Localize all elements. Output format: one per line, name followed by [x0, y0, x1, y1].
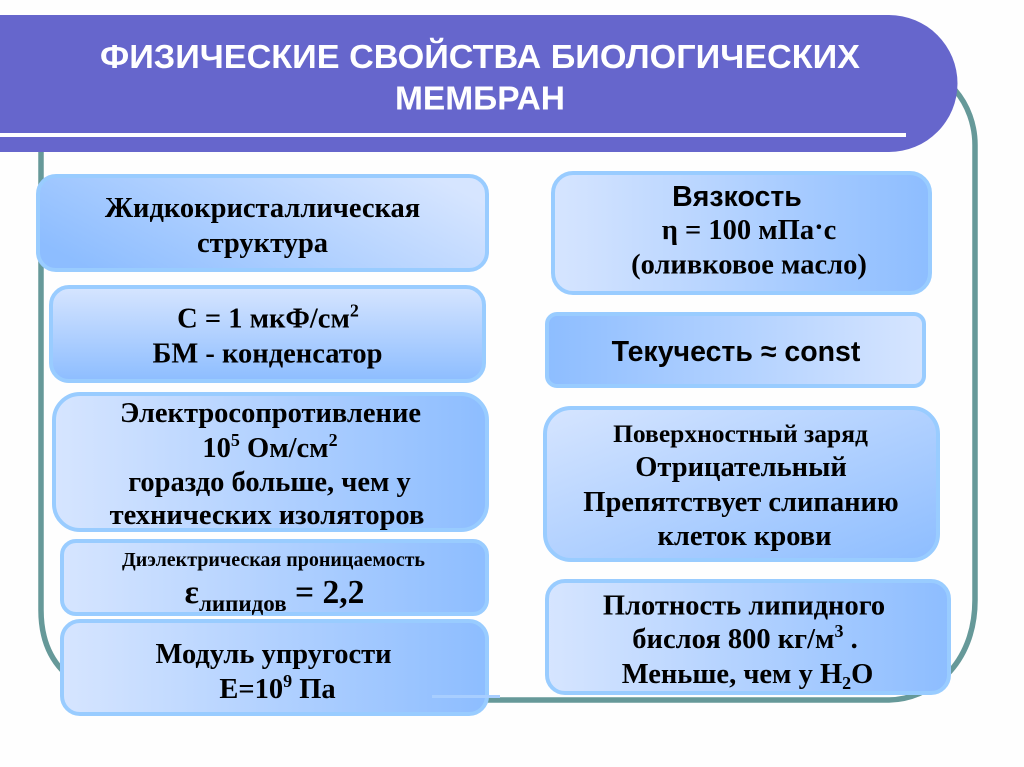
title — [100, 37, 860, 116]
panel: capacitance — [51, 287, 484, 381]
panel: dielectric permittivity: липидов — [199, 591, 287, 616]
panel: surface charge: Отрицательный — [635, 452, 847, 483]
panel: elastic modulus: 9 — [283, 671, 292, 691]
panel: surface charge: клеток крови — [657, 521, 832, 552]
panel: dielectric permittivity — [62, 541, 487, 616]
panel: elastic modulus: E=10 — [219, 674, 283, 705]
panel: dielectric permittivity: = 2,2 — [287, 574, 364, 611]
panel: electrical resistance: Ом/см — [240, 433, 329, 464]
panel: elastic modulus — [62, 621, 500, 714]
panel: capacitance: С = 1 мкФ/см — [177, 304, 350, 334]
panel: capacitance: 2 — [350, 300, 359, 320]
panel: lipid bilayer density: Меньше, чем у H — [622, 659, 842, 690]
panel: viscosity: Вязкость — [672, 181, 802, 213]
panel: capacitance: БМ - конденсатор — [153, 338, 382, 370]
header banner — [0, 15, 957, 152]
panel: lipid bilayer density — [547, 581, 949, 693]
panel: elastic modulus: Па — [292, 674, 336, 705]
panel: fluidity — [547, 314, 924, 386]
panel: lipid bilayer density: 3 — [834, 621, 843, 641]
panel: liquid crystal structure: структура — [197, 228, 328, 259]
panel: liquid crystal structure — [38, 176, 487, 270]
panel: surface charge: Препятствует слипанию — [583, 487, 899, 518]
title: МЕМБРАН — [395, 80, 565, 116]
panel: electrical resistance: 5 — [231, 430, 240, 450]
panel: lipid bilayer density: 2 — [842, 673, 851, 693]
panel: lipid bilayer density: Плотность липидного — [603, 590, 885, 622]
panel: viscosity: (оливковое масло) — [631, 250, 867, 280]
panel: electrical resistance: технических изоляторов — [110, 500, 424, 531]
panel: surface charge — [545, 408, 938, 560]
panel: viscosity: · — [814, 212, 824, 243]
panel: lipid bilayer density: . — [843, 624, 858, 655]
panel: lipid bilayer density: бислоя 800 кг/м — [632, 624, 834, 655]
content frame — [41, 90, 975, 700]
panel: electrical resistance: 10 — [202, 433, 231, 464]
panel: dielectric permittivity: ε — [185, 574, 199, 611]
panel: viscosity — [553, 173, 930, 293]
panel: elastic modulus: Модуль упругости — [155, 639, 392, 670]
panel: electrical resistance — [54, 394, 487, 531]
panel: lipid bilayer density: O — [851, 659, 873, 690]
panel: liquid crystal structure: Жидкокристаллическая — [105, 193, 420, 224]
panel: viscosity: η = 100 мПа — [662, 215, 814, 246]
title: ФИЗИЧЕСКИЕ СВОЙСТВА БИОЛОГИЧЕСКИХ — [100, 37, 860, 75]
panel: electrical resistance: гораздо больше, чем у — [128, 467, 411, 498]
panel: electrical resistance: 2 — [329, 430, 338, 450]
panel: electrical resistance: Электросопротивление — [120, 398, 421, 429]
panel: dielectric permittivity: Диэлектрическая проницаемость — [122, 549, 425, 571]
panel: fluidity: Текучесть ≈ const — [612, 336, 861, 368]
panel: viscosity: с — [824, 215, 836, 246]
panel: surface charge: Поверхностный заряд — [613, 419, 868, 448]
